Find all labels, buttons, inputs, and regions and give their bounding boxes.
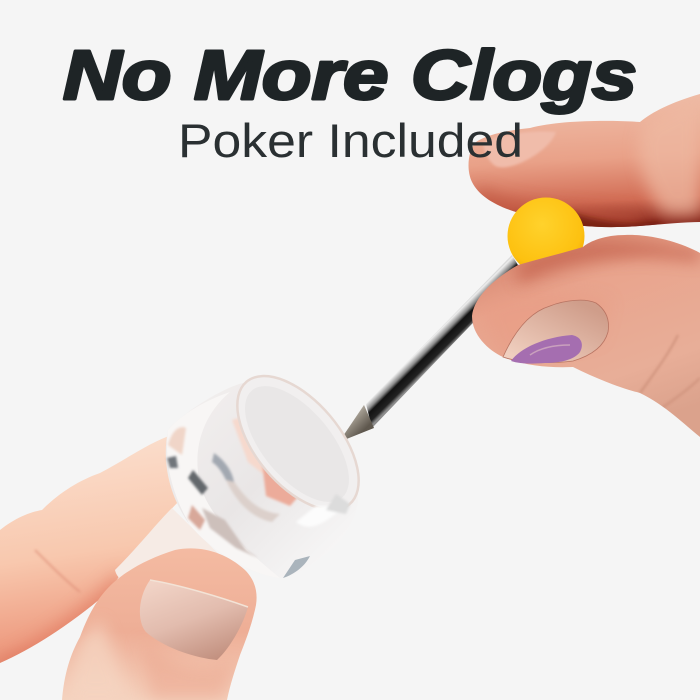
hand: left finger — [0, 435, 180, 680]
glass stem — [115, 508, 235, 582]
poker tip — [339, 405, 374, 442]
jar body — [166, 382, 358, 578]
poker shaft — [366, 255, 522, 428]
title: No More Clogs — [63, 36, 637, 114]
jar top face — [214, 355, 382, 531]
nail polish — [511, 335, 582, 364]
nail: upper finger — [483, 131, 556, 167]
nail: lower finger — [503, 300, 608, 363]
poker tool — [339, 255, 522, 442]
hand: thumb — [62, 548, 257, 700]
yellow ball — [508, 198, 584, 274]
nail: thumb — [140, 580, 248, 660]
hand: lower finger — [472, 235, 700, 437]
glass jar — [166, 355, 382, 578]
hand: upper finger — [469, 94, 700, 235]
jar reflections — [167, 414, 304, 558]
subtitle: Poker Included — [178, 114, 523, 167]
